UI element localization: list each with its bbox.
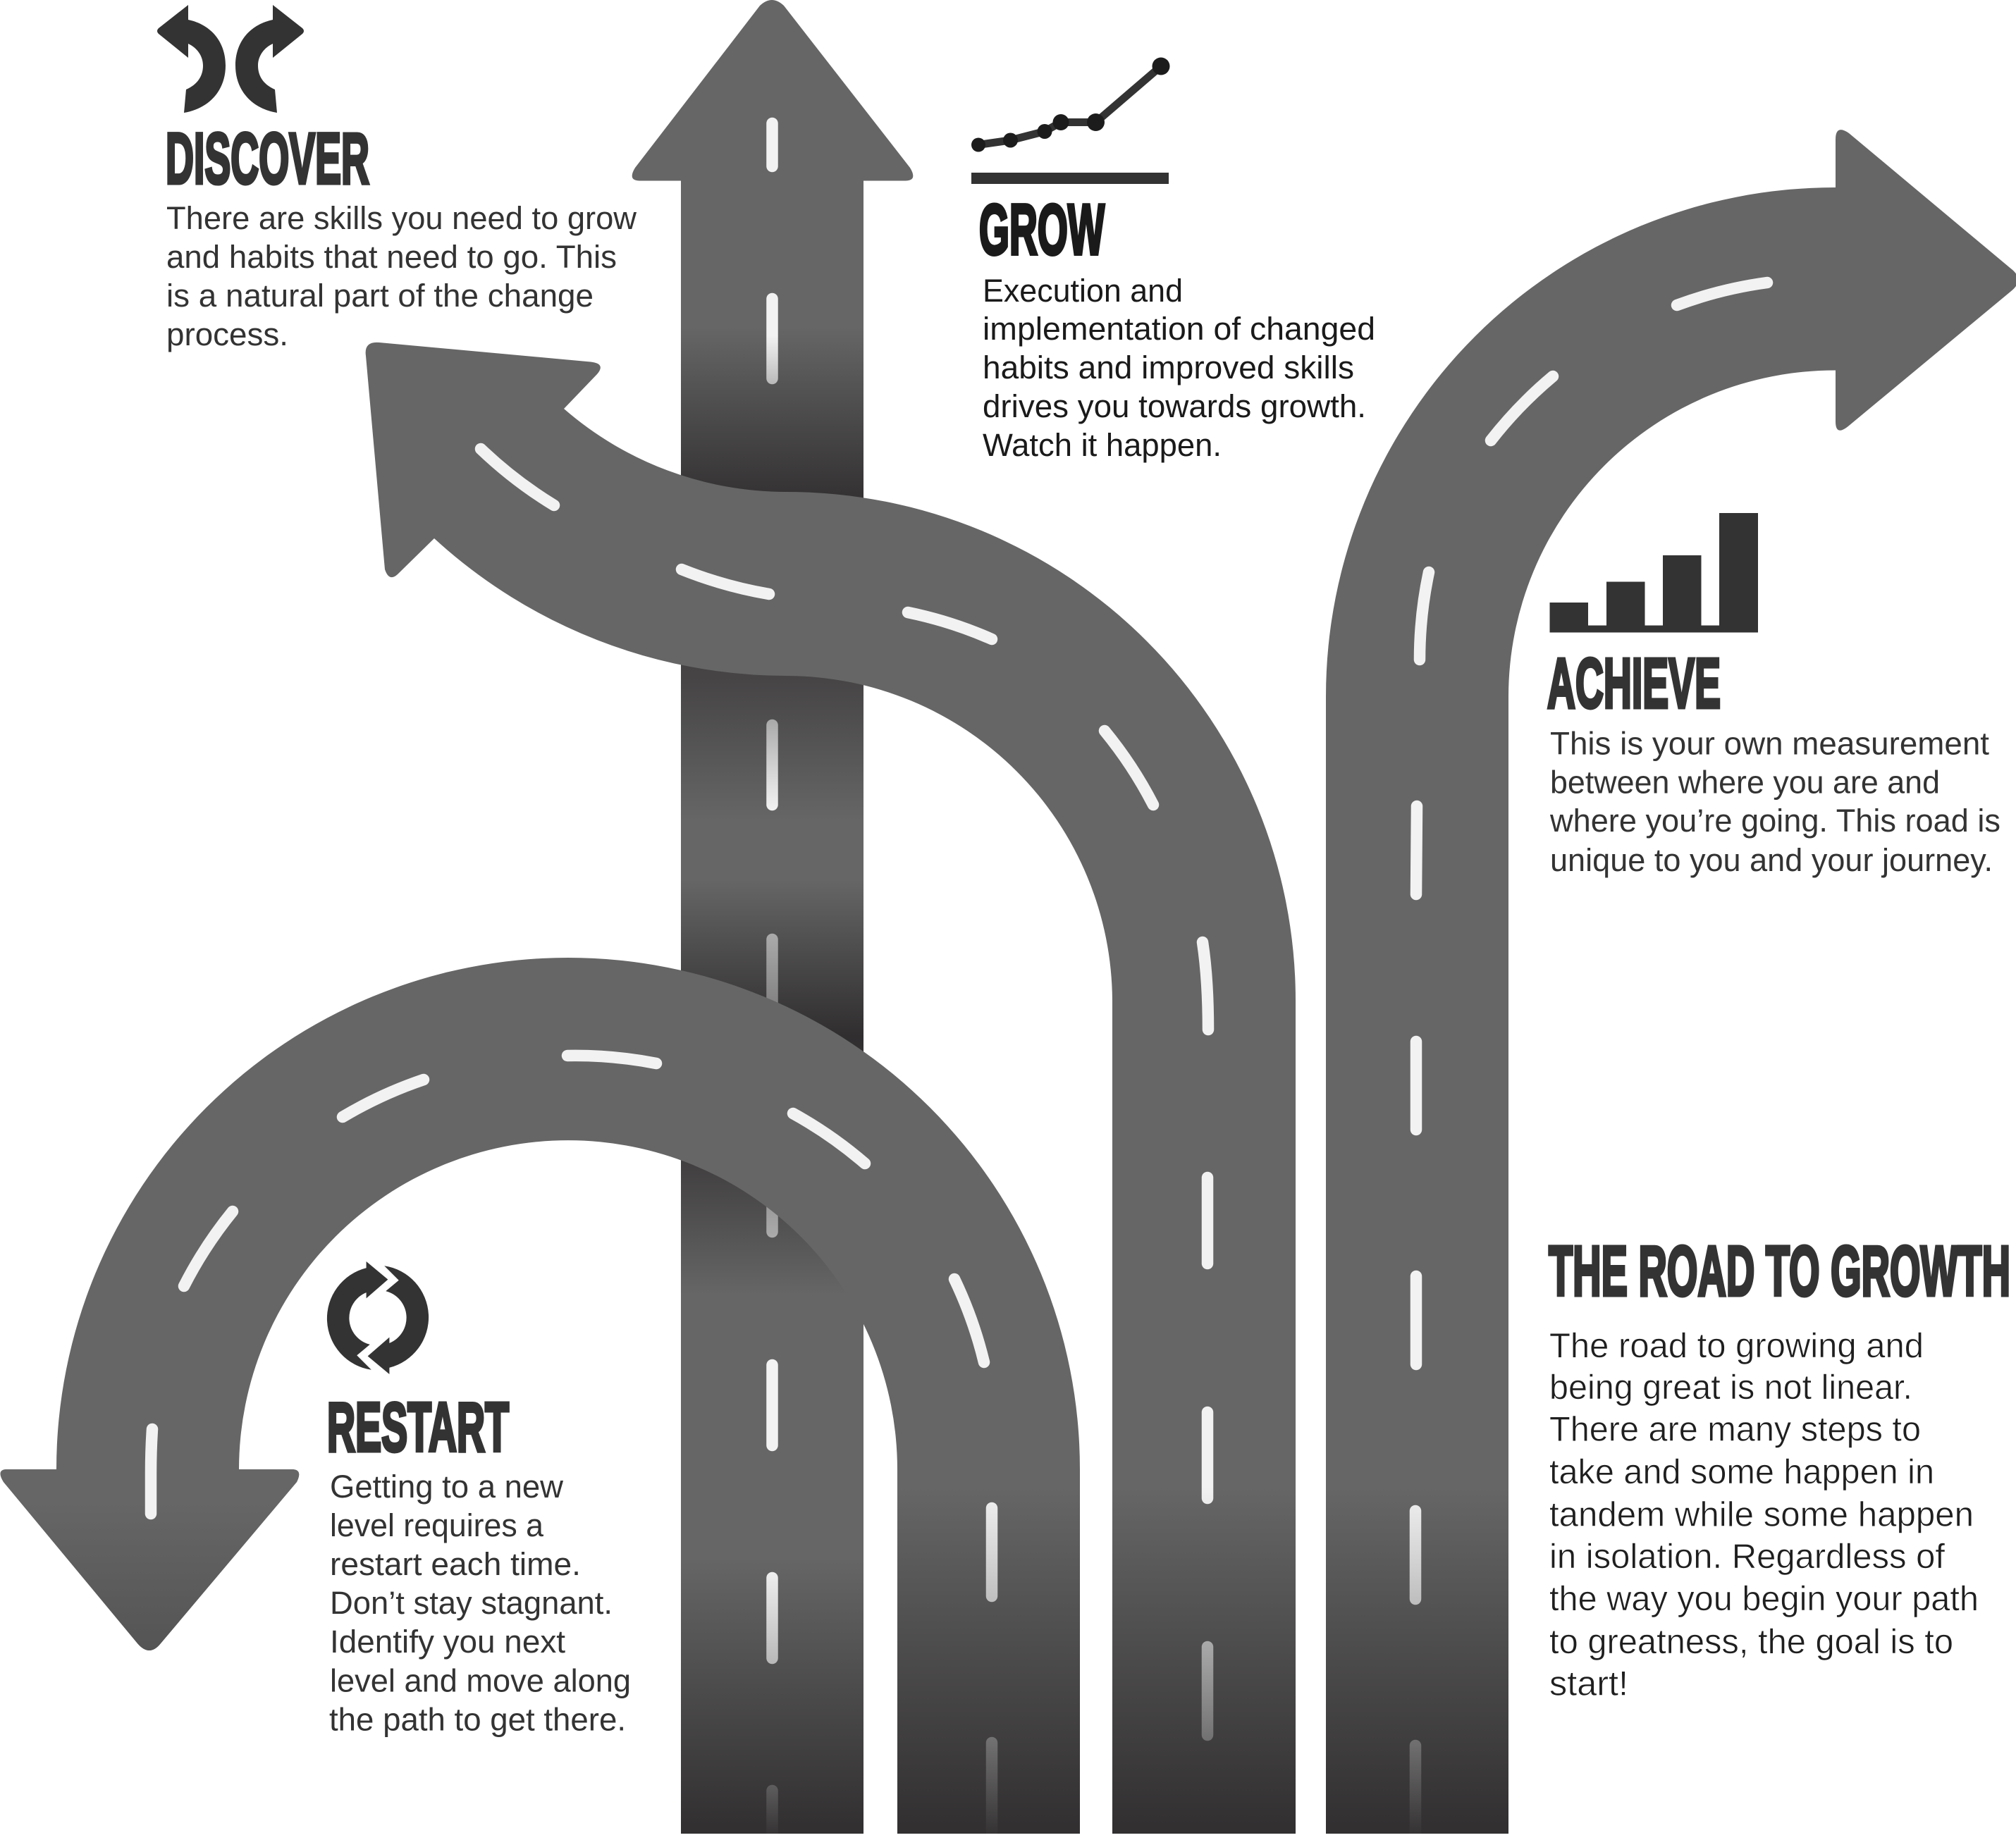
text: achieve body: This is your own measurement [1550, 726, 1990, 761]
text: restart body: Getting to a new [330, 1469, 564, 1505]
text: grow body: habits and improved skills [983, 350, 1354, 385]
text: intro body: There are many steps to [1549, 1411, 1921, 1449]
road: curve arrow pointing right [1326, 130, 2016, 1834]
text: grow body: drives you towards growth. [983, 388, 1366, 424]
text: intro body: The road to growing and [1549, 1327, 1924, 1365]
icon: diverging arrows [157, 5, 304, 113]
text: restart body: the path to get there. [329, 1701, 626, 1738]
text: grow body [983, 273, 1375, 463]
text: intro body: in isolation. Regardless of [1549, 1538, 1945, 1576]
icon: line chart [971, 58, 1170, 184]
text: restart body: restart each time. [330, 1546, 581, 1582]
text: restart body: Don’t stay stagnant. [330, 1585, 613, 1621]
text: discover body: process. [166, 316, 288, 352]
heading: restart: RESTART [327, 1388, 509, 1466]
text: achieve body: where you’re going. This road is [1549, 803, 2000, 839]
text: grow body: implementation of changed [983, 311, 1375, 347]
text: intro body [1549, 1327, 1979, 1703]
text: restart body [329, 1469, 631, 1738]
text: discover body: and habits that need to go. This [166, 239, 617, 275]
text: restart body: level and move along [330, 1663, 631, 1698]
text: intro body: being great is not linear. [1549, 1369, 1912, 1407]
text: intro body: to greatness, the goal is to [1549, 1623, 1953, 1661]
text: intro body: the way you begin your path [1549, 1580, 1979, 1618]
text: achieve body: between where you are and [1550, 764, 1940, 801]
road: straight up arrow [632, 0, 913, 1834]
text: intro body: start! [1549, 1665, 1628, 1703]
text: discover body [166, 200, 637, 352]
text: discover body: There are skills you need to grow [166, 200, 637, 236]
text: restart body: level requires a [330, 1507, 544, 1543]
road: S-curve arrow pointing upper left [366, 342, 1296, 1834]
panel: grow [971, 58, 1375, 463]
heading: grow: GROW [979, 190, 1105, 269]
text: intro body: tandem while some happen [1549, 1495, 1974, 1533]
panel: the road to growth [1549, 1232, 2010, 1703]
text: grow body: Watch it happen. [983, 427, 1222, 463]
heading: achieve: ACHIEVE [1547, 644, 1721, 723]
icon: circular arrows [327, 1261, 429, 1374]
text: achieve body [1549, 726, 2000, 878]
icon: bar chart [1549, 513, 1758, 633]
text: restart body: Identify you next [330, 1624, 566, 1660]
panel: discover [157, 5, 637, 352]
text: discover body: is a natural part of the change [166, 278, 594, 314]
panel: achieve [1547, 513, 2000, 878]
panel: restart [327, 1261, 631, 1738]
text: achieve body: unique to you and your journey. [1550, 842, 1993, 878]
text: grow body: Execution and [983, 273, 1183, 309]
heading: discover: DISCOVER [166, 118, 369, 199]
text: intro body: take and some happen in [1549, 1453, 1934, 1491]
road: U-turn arrow pointing down [1, 958, 1080, 1834]
